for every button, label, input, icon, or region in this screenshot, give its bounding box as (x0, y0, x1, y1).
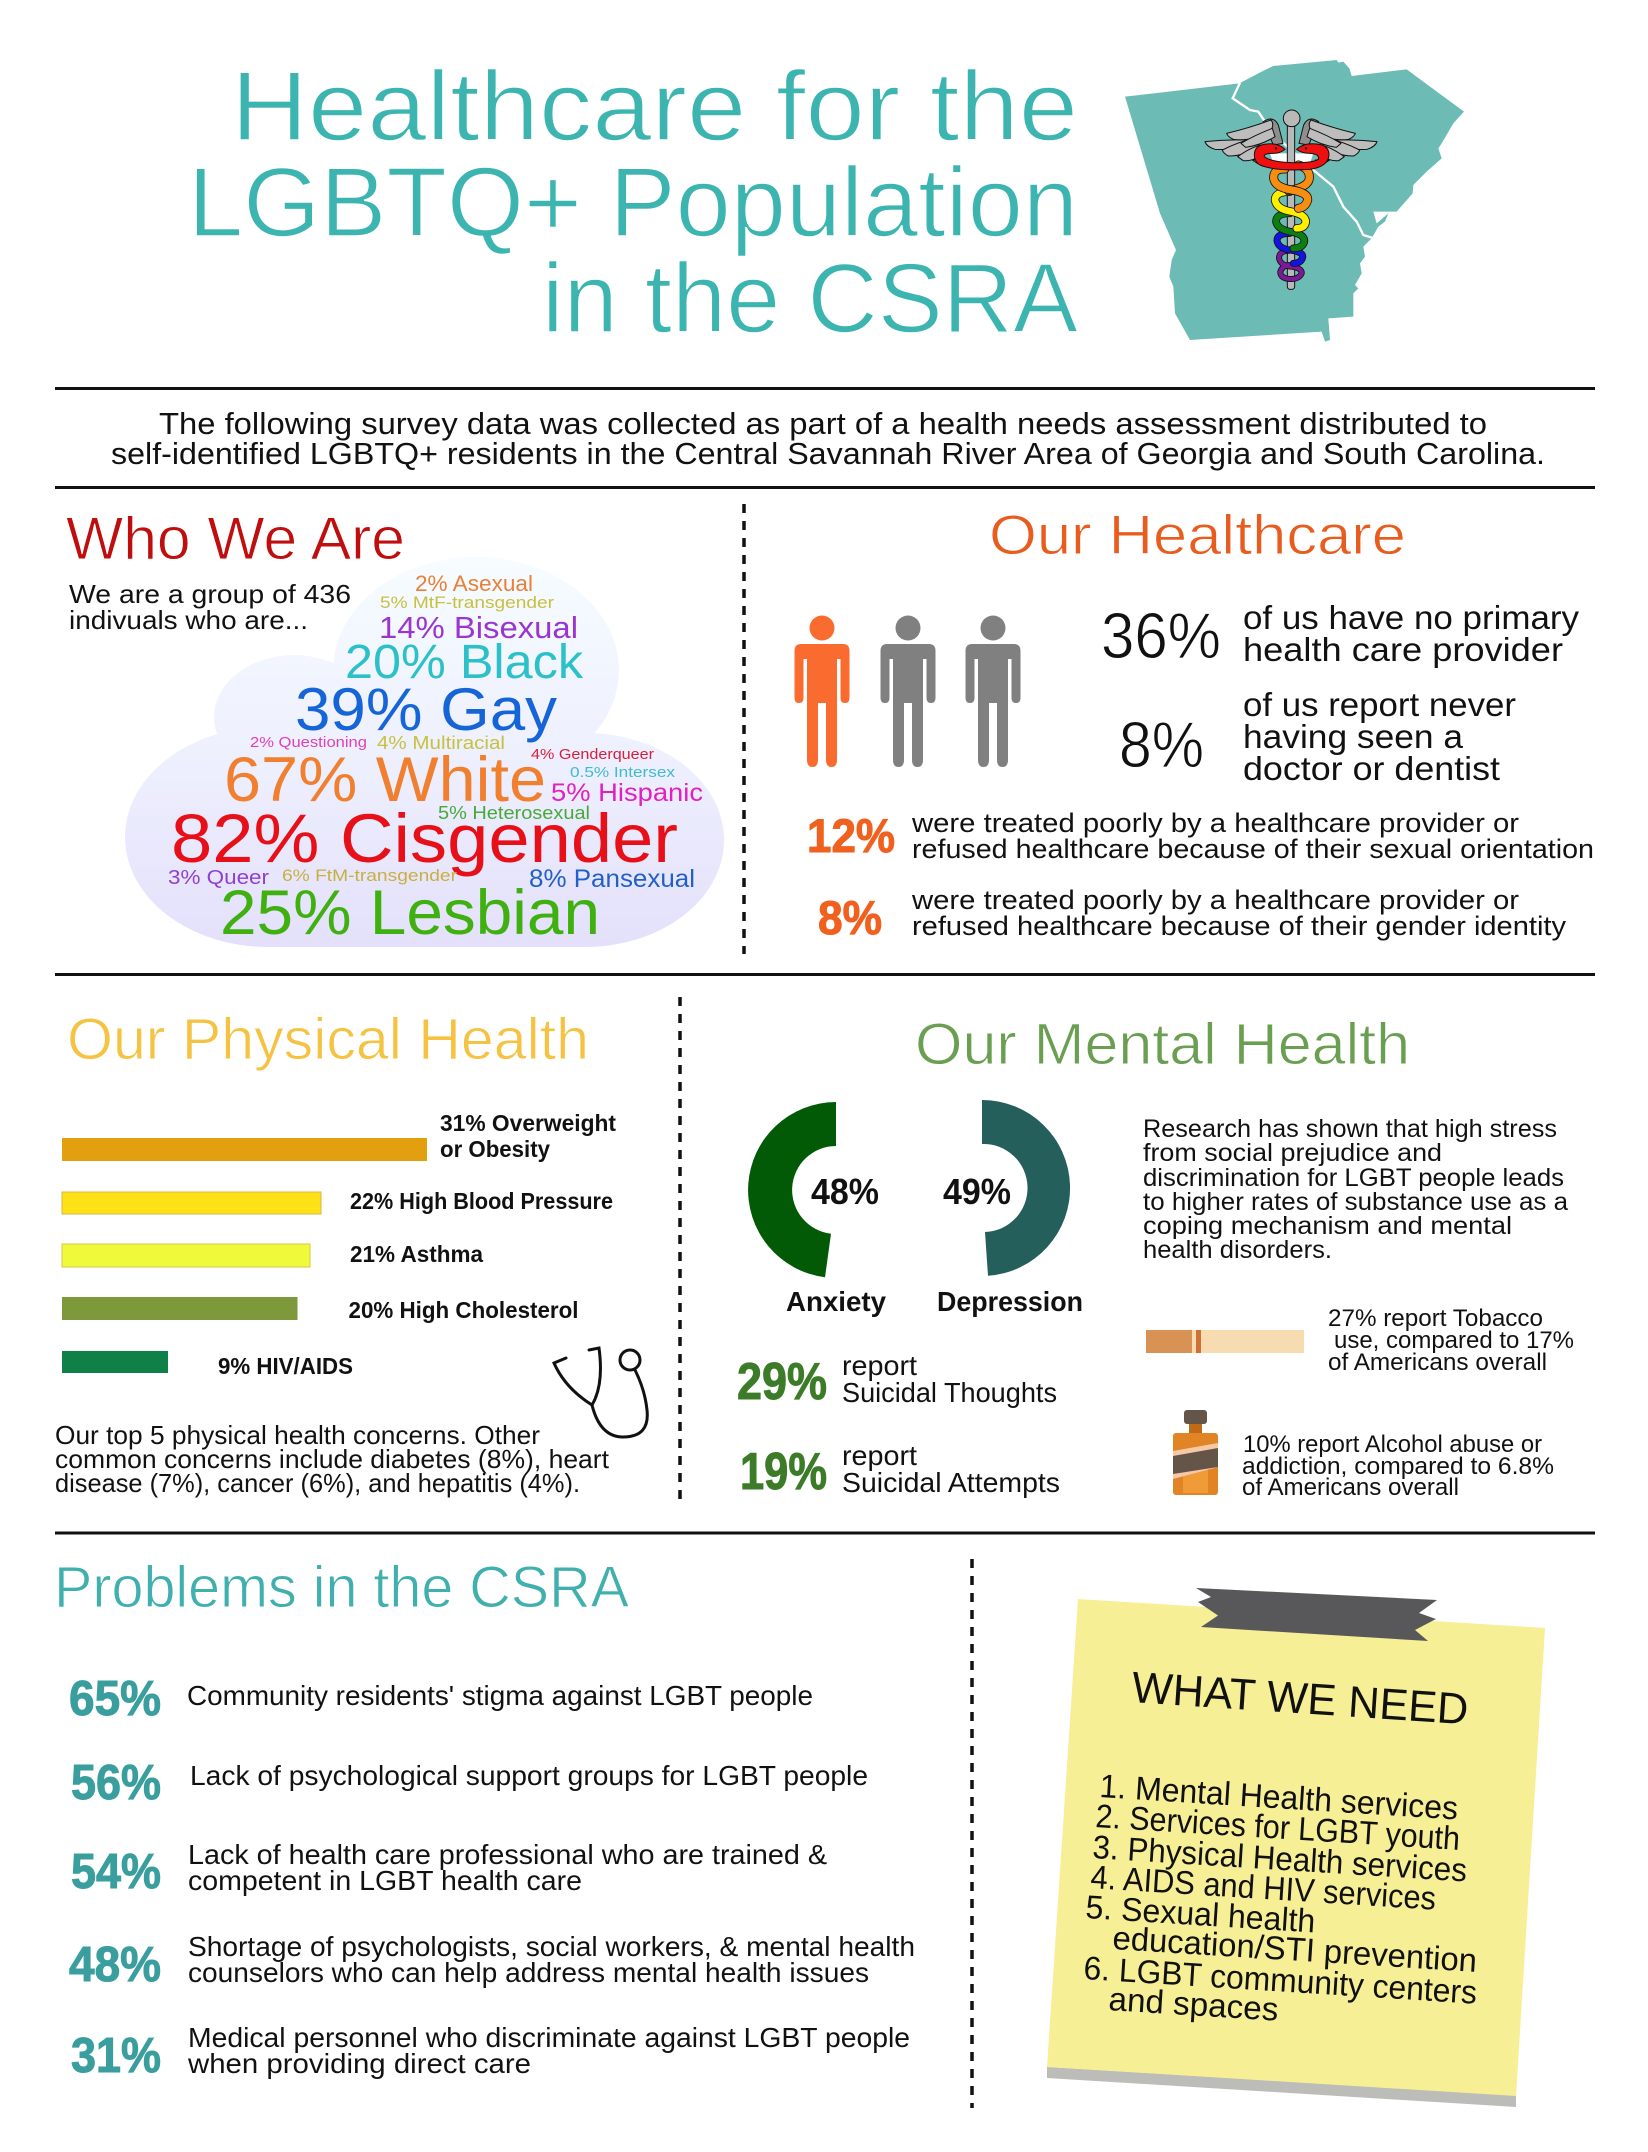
word cloud: 3% Queer (168, 867, 269, 889)
note list: 4. AIDS and HIV services (1090, 1858, 1437, 1917)
word cloud: 5% Hispanic (551, 779, 703, 807)
stat: treated poorly gender identity: refused healthcare because of their gender identity (912, 911, 1567, 941)
heading: our physical health: Our Physical Health (67, 1007, 589, 1072)
heading: our mental health: Our Mental Health (915, 1012, 1410, 1077)
word cloud: 82% Cisgender (171, 800, 678, 877)
text: other concerns: disease (7%), cancer (6%), and hepatitis (4%). (55, 1468, 580, 1498)
title: LGBTQ+ Population (188, 147, 1078, 257)
problem: discrimination: Medical personnel who discriminate against LGBT people (188, 2022, 910, 2053)
stat: suicidal attempts (740, 1440, 1060, 1501)
panel: who we are (66, 505, 724, 948)
word cloud: 39% Gay (295, 676, 557, 743)
note list: 5. Sexual health (1085, 1888, 1316, 1939)
text: alcohol abuse (1242, 1431, 1554, 1501)
text: alcohol abuse: addiction, compared to 6.8% (1242, 1453, 1554, 1480)
stat: never seen a doctor: of us report never (1243, 686, 1516, 723)
heading: our healthcare: Our Healthcare (989, 503, 1406, 566)
note list: 3. Physical Health services (1092, 1828, 1468, 1889)
problem: shortage of mental health staff: Shortage of psychologists, social workers, & mental health (188, 1931, 915, 1962)
problem: support groups: Lack of psychological support groups for LGBT people (190, 1760, 868, 1791)
icon: cigarette (1146, 1330, 1304, 1353)
text: tobacco use: of Americans overall (1328, 1349, 1547, 1376)
title (188, 51, 1079, 353)
problem: trained professionals: competent in LGBT health care (188, 1865, 582, 1896)
note list: 1. Mental Health services (1099, 1767, 1459, 1827)
stat: treated poorly sexual orientation: 12% (807, 809, 895, 862)
stat: no primary provider: health care provider (1243, 631, 1563, 668)
text: tobacco use: 27% report Tobacco (1328, 1305, 1543, 1332)
stat: no primary provider: of us have no primary (1243, 599, 1580, 636)
bar chart: physical health concerns: 22% High Blood Pressure (350, 1188, 613, 1214)
intro text: The following survey data was collected as part of a health needs assessment distributed to (159, 406, 1487, 441)
note list: 6. LGBT community centers (1083, 1949, 1478, 2011)
stat: treated poorly sexual orientation: refused healthcare because of their sexual orientation (912, 834, 1594, 864)
text: tobacco use (1328, 1305, 1574, 1376)
problem: stigma: 65% (69, 1672, 161, 1726)
problem: discrimination: when providing direct care (187, 2048, 531, 2079)
icon: cloud background (125, 557, 724, 947)
icon: orange person (794, 616, 850, 767)
stat: suicidal thoughts (737, 1350, 1057, 1411)
chart: depression donut: 49% (943, 1171, 1011, 1212)
text: other concerns: Our top 5 physical health concerns. Other (55, 1420, 540, 1450)
stat: treated poorly gender identity: were treated poorly by a healthcare provider or (911, 885, 1519, 915)
heading: who we are: Who We Are (66, 505, 405, 572)
text: research note: to higher rates of substance use as a (1143, 1188, 1568, 1216)
note list (1083, 1767, 1478, 2028)
chart: depression donut (937, 1100, 1083, 1317)
stat: suicidal thoughts: 29% (737, 1353, 827, 1411)
note list: education/STI prevention (1112, 1919, 1478, 1979)
word cloud: 2% Questioning (250, 734, 367, 751)
stat: suicidal thoughts: Suicidal Thoughts (842, 1377, 1057, 1408)
chart: anxiety donut: Anxiety (786, 1286, 886, 1317)
panel: our mental health (737, 1012, 1574, 1501)
text: other concerns (55, 1420, 610, 1498)
icon: stethoscope (554, 1348, 647, 1437)
word cloud: 5% Heterosexual (438, 803, 590, 823)
word cloud: 6% FtM-transgender (282, 866, 457, 885)
text: research note (1143, 1115, 1568, 1264)
word cloud: 20% Black (345, 636, 584, 689)
panel: problems in the csra (54, 1555, 915, 2083)
divider lines (55, 388, 1595, 1533)
icon: gray person (966, 616, 1020, 767)
problem: support groups (71, 1756, 868, 1810)
icon: alcohol bottle (1173, 1410, 1218, 1495)
text: research note: from social prejudice and (1143, 1139, 1442, 1167)
stat: treated poorly gender identity (818, 885, 1567, 944)
problem: support groups: 56% (71, 1756, 161, 1810)
stat: never seen a doctor (1119, 686, 1516, 787)
stat: never seen a doctor: having seen a (1243, 718, 1464, 755)
word cloud: 67% White (224, 745, 546, 815)
bar chart: physical health concerns: or Obesity (440, 1136, 550, 1162)
stat: suicidal attempts: report (842, 1440, 917, 1471)
problem: trained professionals: 54% (71, 1845, 161, 1899)
stat: never seen a doctor: doctor or dentist (1243, 750, 1500, 787)
chart: depression donut: Depression (937, 1286, 1083, 1317)
text: research note: health disorders. (1143, 1236, 1332, 1264)
text: research note: discrimination for LGBT people leads (1143, 1164, 1564, 1192)
text: alcohol abuse: of Americans overall (1242, 1474, 1459, 1501)
heading: problems in the csra: Problems in the CSRA (54, 1555, 629, 1620)
problem: trained professionals (71, 1839, 827, 1899)
problem: discrimination: 31% (71, 2029, 161, 2083)
note shadow (1047, 2067, 1516, 2107)
stat: no primary provider (1101, 599, 1580, 672)
problem: shortage of mental health staff: 48% (69, 1938, 161, 1992)
intro text: self-identified LGBTQ+ residents in the Central Savannah River Area of Georgia and South Carolina. (111, 436, 1545, 471)
panel: our healthcare (794, 503, 1594, 944)
text: research note: coping mechanism and mental (1143, 1212, 1512, 1240)
title: Healthcare for the (231, 51, 1078, 161)
stat: never seen a doctor: 8% (1119, 708, 1204, 781)
intro text (111, 406, 1545, 471)
text: group description (69, 579, 351, 635)
text: group description: We are a group of 436 (69, 579, 351, 609)
title: in the CSRA (542, 243, 1079, 353)
chart: anxiety donut: 48% (811, 1171, 879, 1212)
problem: stigma (69, 1672, 813, 1726)
problem: trained professionals: Lack of health care professional who are trained & (188, 1839, 827, 1870)
icon: gray person (880, 616, 936, 767)
bar chart: physical health concerns: 20% High Cholesterol (348, 1297, 578, 1323)
note list: and spaces (1108, 1980, 1280, 2028)
note list: 2. Services for LGBT youth (1095, 1797, 1461, 1857)
bar chart: physical health concerns: 31% Overweight (440, 1110, 616, 1136)
problem: shortage of mental health staff (69, 1931, 915, 1992)
word cloud: 2% Asexual (415, 571, 533, 596)
text: research note: Research has shown that high stress (1143, 1115, 1557, 1143)
word cloud: 4% Multiracial (377, 733, 505, 753)
panel: what we need sticky note (1047, 1588, 1545, 2107)
icon: tape (1196, 1588, 1437, 1641)
stat: suicidal attempts: 19% (740, 1443, 827, 1501)
note heading: WHAT WE NEED (1130, 1663, 1470, 1734)
note paper (1047, 1599, 1545, 2096)
bar chart: physical health concerns: 21% Asthma (350, 1241, 483, 1267)
text: other concerns: common concerns include diabetes (8%), heart (55, 1444, 610, 1474)
problem: shortage of mental health staff: counselors who can help address mental health issues (188, 1957, 869, 1988)
stat: suicidal thoughts: report (842, 1350, 917, 1381)
bar chart: physical health concerns: 9% HIV/AIDS (218, 1353, 353, 1379)
word cloud: 25% Lesbian (220, 878, 600, 948)
panel: our physical health (55, 1007, 647, 1498)
word cloud: 8% Pansexual (529, 865, 695, 893)
icon: map of Georgia and South Carolina with rainbow caduceus (1125, 60, 1464, 342)
word cloud: 14% Bisexual (379, 610, 578, 645)
word cloud: 5% MtF-transgender (380, 593, 554, 612)
stat: suicidal attempts: Suicidal Attempts (842, 1467, 1060, 1498)
stat: treated poorly sexual orientation: were treated poorly by a healthcare provider or (911, 808, 1519, 838)
text: tobacco use: use, compared to 17% (1334, 1327, 1574, 1354)
bar chart: physical health concerns (62, 1110, 616, 1379)
chart: anxiety donut (748, 1102, 886, 1317)
stat: treated poorly gender identity: 8% (818, 891, 882, 944)
problem: discrimination (71, 2022, 910, 2083)
dashed dividers (680, 504, 972, 2108)
problem: stigma: Community residents' stigma against LGBT people (187, 1680, 813, 1711)
word cloud: 4% Genderqueer (531, 746, 654, 763)
stat: no primary provider: 36% (1101, 599, 1221, 672)
word cloud (168, 571, 703, 948)
stat: treated poorly sexual orientation (807, 808, 1594, 864)
word cloud: 0.5% Intersex (570, 764, 676, 781)
text: group description: indivuals who are... (69, 605, 308, 635)
text: alcohol abuse: 10% report Alcohol abuse or (1243, 1431, 1542, 1458)
